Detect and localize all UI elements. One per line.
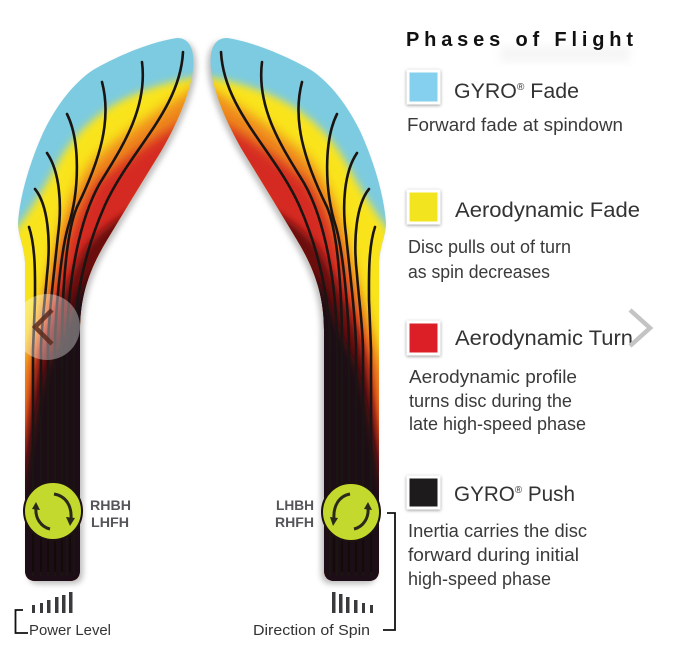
label: Power Level: Power Level <box>29 622 111 639</box>
legend: Aerodynamic Turn: turns disc during the <box>409 391 572 411</box>
legend: Aerodynamic Fade: Aerodynamic Fade <box>455 199 640 222</box>
left flight path diagram (RHBH / LHFH) <box>0 20 210 600</box>
label: RHBH LHFH <box>90 497 131 530</box>
carousel next arrow <box>630 310 650 346</box>
swatch: red <box>408 322 439 354</box>
label: Direction of Spin: Direction of Spin <box>253 622 370 639</box>
legend: GYRO Push: GYRO <box>454 483 516 506</box>
legend: GYRO Push: Push <box>522 483 575 506</box>
legend: GYRO Fade: Forward fade at spindown <box>407 115 623 135</box>
icon: right spin disc <box>322 483 380 541</box>
legend: GYRO Fade: ® <box>517 82 525 93</box>
carousel previous button <box>14 294 80 360</box>
label: RHBH LHFH: LHFH <box>91 514 129 530</box>
spin direction bars <box>332 592 373 613</box>
bracket: direction of spin <box>383 513 395 630</box>
legend: Aerodynamic Turn: Aerodynamic profile <box>409 367 577 387</box>
legend: GYRO Push: Inertia carries the disc <box>408 521 587 541</box>
power level bars <box>32 592 72 613</box>
label: LHBH RHFH: LHBH <box>276 497 314 513</box>
swatch: yellow <box>408 191 439 223</box>
swatch: black <box>408 477 439 508</box>
legend: GYRO Fade <box>407 71 623 135</box>
legend: GYRO Push: high-speed phase <box>408 569 551 589</box>
legend: GYRO Fade: Fade <box>524 80 579 103</box>
label: LHBH RHFH <box>275 497 314 530</box>
legend: GYRO Push: forward during initial <box>408 545 579 565</box>
label: LHBH RHFH: RHFH <box>275 514 314 530</box>
legend: Aerodynamic Turn <box>408 322 633 434</box>
bracket: power level <box>16 610 28 633</box>
label: RHBH LHFH: RHBH <box>90 497 131 513</box>
title shadow <box>500 46 630 62</box>
legend: GYRO Fade: GYRO <box>454 80 516 103</box>
legend: GYRO Push <box>408 477 587 589</box>
legend: GYRO Push: ® <box>515 485 523 496</box>
right flight path diagram (LHBH / RHFH) <box>194 20 404 600</box>
icon: left spin disc <box>24 482 82 540</box>
title: Phases of Flight <box>406 29 633 51</box>
legend: Aerodynamic Fade <box>408 191 640 282</box>
legend: Aerodynamic Fade: as spin decreases <box>408 262 550 282</box>
swatch: blue <box>408 71 439 103</box>
legend: Aerodynamic Turn: late high-speed phase <box>409 414 586 434</box>
legend: Aerodynamic Fade: Disc pulls out of turn <box>408 237 571 257</box>
legend: Aerodynamic Turn: Aerodynamic Turn <box>455 327 633 350</box>
